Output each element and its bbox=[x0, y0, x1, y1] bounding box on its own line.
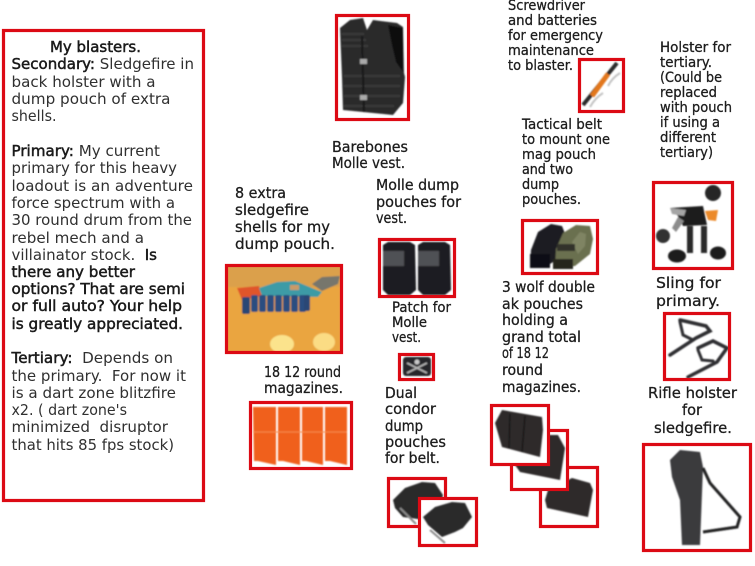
label: holster for tertiary: tertiary. bbox=[660, 55, 712, 71]
label: wolf double ak pouches: holding a bbox=[502, 311, 568, 329]
label: sledgefire shells bbox=[235, 184, 335, 253]
text block: primary: rebel mech and a bbox=[12, 229, 144, 247]
text block: primary: there any better bbox=[12, 263, 136, 281]
photo: molle vest bbox=[336, 16, 408, 120]
label: holster for tertiary: tertiary) bbox=[660, 145, 713, 161]
label: sling for primary bbox=[656, 274, 722, 310]
text block: secondary: Secondary: Sledgefire in bbox=[12, 55, 194, 73]
label: tactical belt: mag pouch bbox=[522, 147, 596, 163]
photo: sledgefire shells bbox=[226, 265, 342, 353]
label: wolf double ak pouches: grand total bbox=[502, 328, 581, 346]
photo: slings bbox=[664, 314, 730, 380]
photo: molle dump pouches bbox=[380, 240, 454, 296]
label: tactical belt: Tactical belt bbox=[521, 117, 602, 133]
text block: tertiary: the primary. For now it bbox=[12, 367, 186, 385]
photo: thigh holster bbox=[654, 182, 732, 268]
text block: primary: force spectrum with a bbox=[12, 194, 175, 212]
label: sling for primary: Sling for bbox=[656, 274, 722, 292]
photo: wolf pouch two bbox=[511, 430, 569, 490]
label: sledgefire shells: sledgefire bbox=[235, 201, 309, 219]
label: dual condor dump pouches: Dual bbox=[385, 384, 417, 402]
label: holster for tertiary: different bbox=[660, 130, 716, 146]
text block: tertiary: x2. ( dart zone's bbox=[12, 401, 127, 419]
label: wolf double ak pouches: of 18 12 bbox=[502, 344, 549, 362]
label: molle dump pouches bbox=[376, 176, 462, 227]
text block: primary: or full auto? Your help bbox=[12, 297, 182, 315]
text block: secondary bbox=[12, 55, 194, 125]
label: tactical belt: and two bbox=[522, 162, 573, 178]
label: 18 12 round magazines bbox=[264, 363, 343, 397]
label: rifle holster: Rifle holster bbox=[648, 384, 738, 402]
photo: condor pouch one bbox=[388, 478, 446, 526]
label: holster for tertiary: replaced bbox=[660, 85, 717, 101]
label: 18 12 round magazines: 18 12 round bbox=[264, 363, 341, 381]
label: holster for tertiary bbox=[660, 40, 732, 161]
label: barebones molle vest: Barebones bbox=[332, 138, 408, 156]
label: molle dump pouches: pouches for bbox=[376, 193, 462, 211]
text block: primary bbox=[12, 142, 193, 333]
text block: primary: options? That are semi bbox=[12, 280, 185, 298]
label: patch for molle vest bbox=[392, 300, 451, 346]
panel: my blasters bbox=[4, 30, 204, 500]
text block: primary: 30 round drum from the bbox=[12, 211, 192, 229]
label: wolf double ak pouches: ak pouches bbox=[502, 295, 583, 313]
label: sledgefire shells: dump pouch. bbox=[235, 235, 335, 253]
photo: orange magazines bbox=[250, 402, 352, 468]
label: patch for molle vest: vest. bbox=[392, 330, 421, 346]
label: patch for molle vest: Patch for bbox=[392, 300, 451, 316]
label: screwdriver and batteries: to blaster. bbox=[508, 58, 573, 74]
label: barebones molle vest: Molle vest. bbox=[332, 154, 405, 172]
label: screwdriver and batteries bbox=[508, 0, 603, 74]
label: holster for tertiary: (Could be bbox=[660, 70, 722, 86]
text block: secondary: back holster with a bbox=[12, 73, 156, 91]
text block: tertiary bbox=[11, 349, 186, 454]
label: dual condor dump pouches: for belt. bbox=[385, 449, 440, 467]
text block: primary: loadout is an adventure bbox=[12, 177, 193, 195]
label: screwdriver and batteries: maintenance bbox=[508, 43, 594, 59]
label: patch for molle vest: Molle bbox=[392, 315, 427, 331]
label: tactical belt: pouches. bbox=[522, 192, 581, 208]
label: dual condor dump pouches: dump bbox=[385, 417, 423, 435]
text block: tertiary: that hits 85 fps stock) bbox=[12, 436, 174, 454]
photo: tactical belts bbox=[522, 220, 598, 274]
text block: primary: is greatly appreciated. bbox=[12, 315, 183, 333]
label: sledgefire shells: 8 extra bbox=[235, 184, 286, 202]
photo: screwdriver bbox=[580, 60, 624, 112]
text block: secondary: dump pouch of extra bbox=[12, 90, 170, 108]
label: screwdriver and batteries: for emergency bbox=[508, 28, 603, 44]
label: wolf double ak pouches bbox=[502, 278, 595, 396]
label: dual condor dump pouches bbox=[385, 384, 446, 467]
label: holster for tertiary: Holster for bbox=[660, 40, 731, 56]
photo: wolf pouch one bbox=[491, 405, 549, 465]
photo: skull patch bbox=[400, 354, 434, 380]
label: holster for tertiary: with pouch bbox=[660, 100, 732, 116]
label: wolf double ak pouches: magazines. bbox=[502, 378, 581, 396]
photo: wolf pouch three bbox=[540, 468, 598, 526]
text block: tertiary: Tertiary: Depends on bbox=[11, 349, 173, 367]
label: molle dump pouches: Molle dump bbox=[376, 176, 459, 194]
label: tactical belt: to mount one bbox=[522, 132, 610, 148]
text block: tertiary: minimized disruptor bbox=[12, 418, 169, 436]
label: sling for primary: primary. bbox=[656, 292, 720, 310]
label: tactical belt: dump bbox=[522, 177, 559, 193]
text block: primary: villainator stock. Is bbox=[12, 246, 157, 264]
photo: condor pouch two bbox=[419, 498, 477, 546]
label: molle dump pouches: vest. bbox=[376, 209, 407, 227]
label: dual condor dump pouches: pouches bbox=[385, 433, 446, 451]
label: holster for tertiary: if using a bbox=[660, 115, 720, 131]
label: screwdriver and batteries: and batteries bbox=[508, 13, 597, 29]
text block: primary: Primary: My current bbox=[12, 142, 160, 160]
text block: primary: primary for this heavy bbox=[12, 159, 177, 177]
label: 18 12 round magazines: magazines. bbox=[264, 379, 343, 397]
label: rifle holster bbox=[648, 384, 738, 437]
label: wolf double ak pouches: 3 wolf double bbox=[502, 278, 595, 296]
photo: rifle holster bbox=[644, 444, 750, 550]
label: rifle holster: for bbox=[682, 401, 703, 419]
label: barebones molle vest bbox=[332, 138, 408, 172]
label: rifle holster: sledgefire. bbox=[654, 419, 732, 437]
text block: tertiary: is a dart zone blitzfire bbox=[12, 384, 176, 402]
label: tactical belt bbox=[521, 117, 610, 208]
heading: my blasters: My blasters. bbox=[50, 38, 141, 56]
label: sledgefire shells: shells for my bbox=[235, 218, 330, 236]
label: wolf double ak pouches: round bbox=[502, 361, 543, 379]
label: dual condor dump pouches: condor bbox=[385, 400, 437, 418]
text block: secondary: shells. bbox=[12, 107, 56, 125]
